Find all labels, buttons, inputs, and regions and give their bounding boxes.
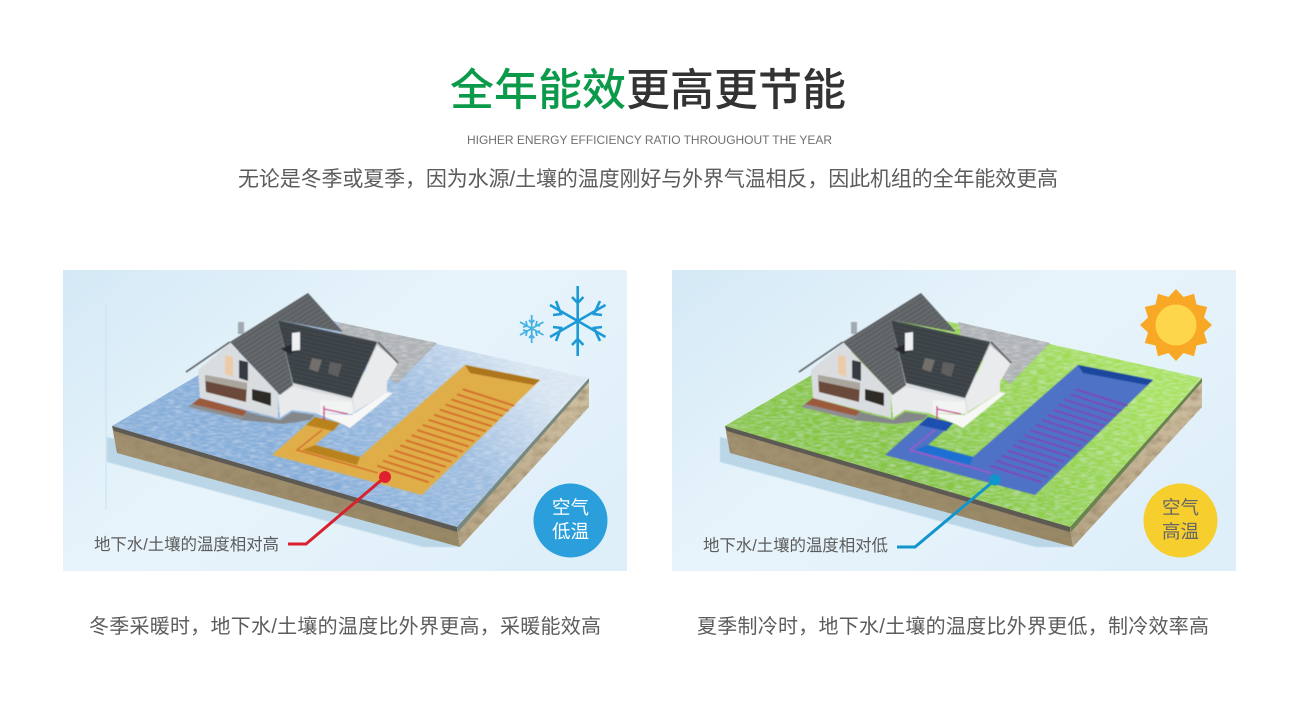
title: 全年能效更高更节能 [450,66,846,115]
callout: high air temperature [1144,484,1218,558]
intro text: 无论是冬季或夏季，因为水源/土壤的温度刚好与外界气温相反，因此机组的全年能效更高 [238,168,1058,191]
summer ground block [720,314,1202,547]
leader line: summer [897,474,1000,547]
callout: high air temperature: 空气 [1162,497,1199,518]
callout: low air temperature: 低温 [552,521,589,542]
callout: low air temperature: 空气 [552,497,589,518]
winter caption: 冬季采暖时，地下水/土壤的温度比外界更高，采暖能效高 [89,615,601,638]
winter sky background [63,270,627,571]
summer house [799,293,1011,428]
summer scene [720,293,1202,547]
winter ground block [106,305,589,547]
summer sky background [672,270,1236,571]
panel: winter heating [63,270,627,571]
icon: large snowflake [550,286,606,356]
callout: low air temperature [534,484,608,558]
winter house [186,293,398,428]
winter ground loop trench [272,365,540,495]
summer caption: 夏季制冷时，地下水/土壤的温度比外界更低，制冷效率高 [697,615,1209,638]
summer label: 地下水/土壤的温度相对低 [703,535,888,555]
icon: sun [1140,289,1212,361]
panel: summer cooling [672,270,1236,571]
winter label: 地下水/土壤的温度相对高 [94,534,279,554]
icon: small snowflake [520,315,544,343]
callout: high air temperature: 高温 [1162,521,1199,542]
english subtitle: HIGHER ENERGY EFFICIENCY RATIO THROUGHOUT THE YEAR [467,133,832,147]
summer ground loop trench [885,365,1153,495]
leader line: winter [288,471,391,544]
